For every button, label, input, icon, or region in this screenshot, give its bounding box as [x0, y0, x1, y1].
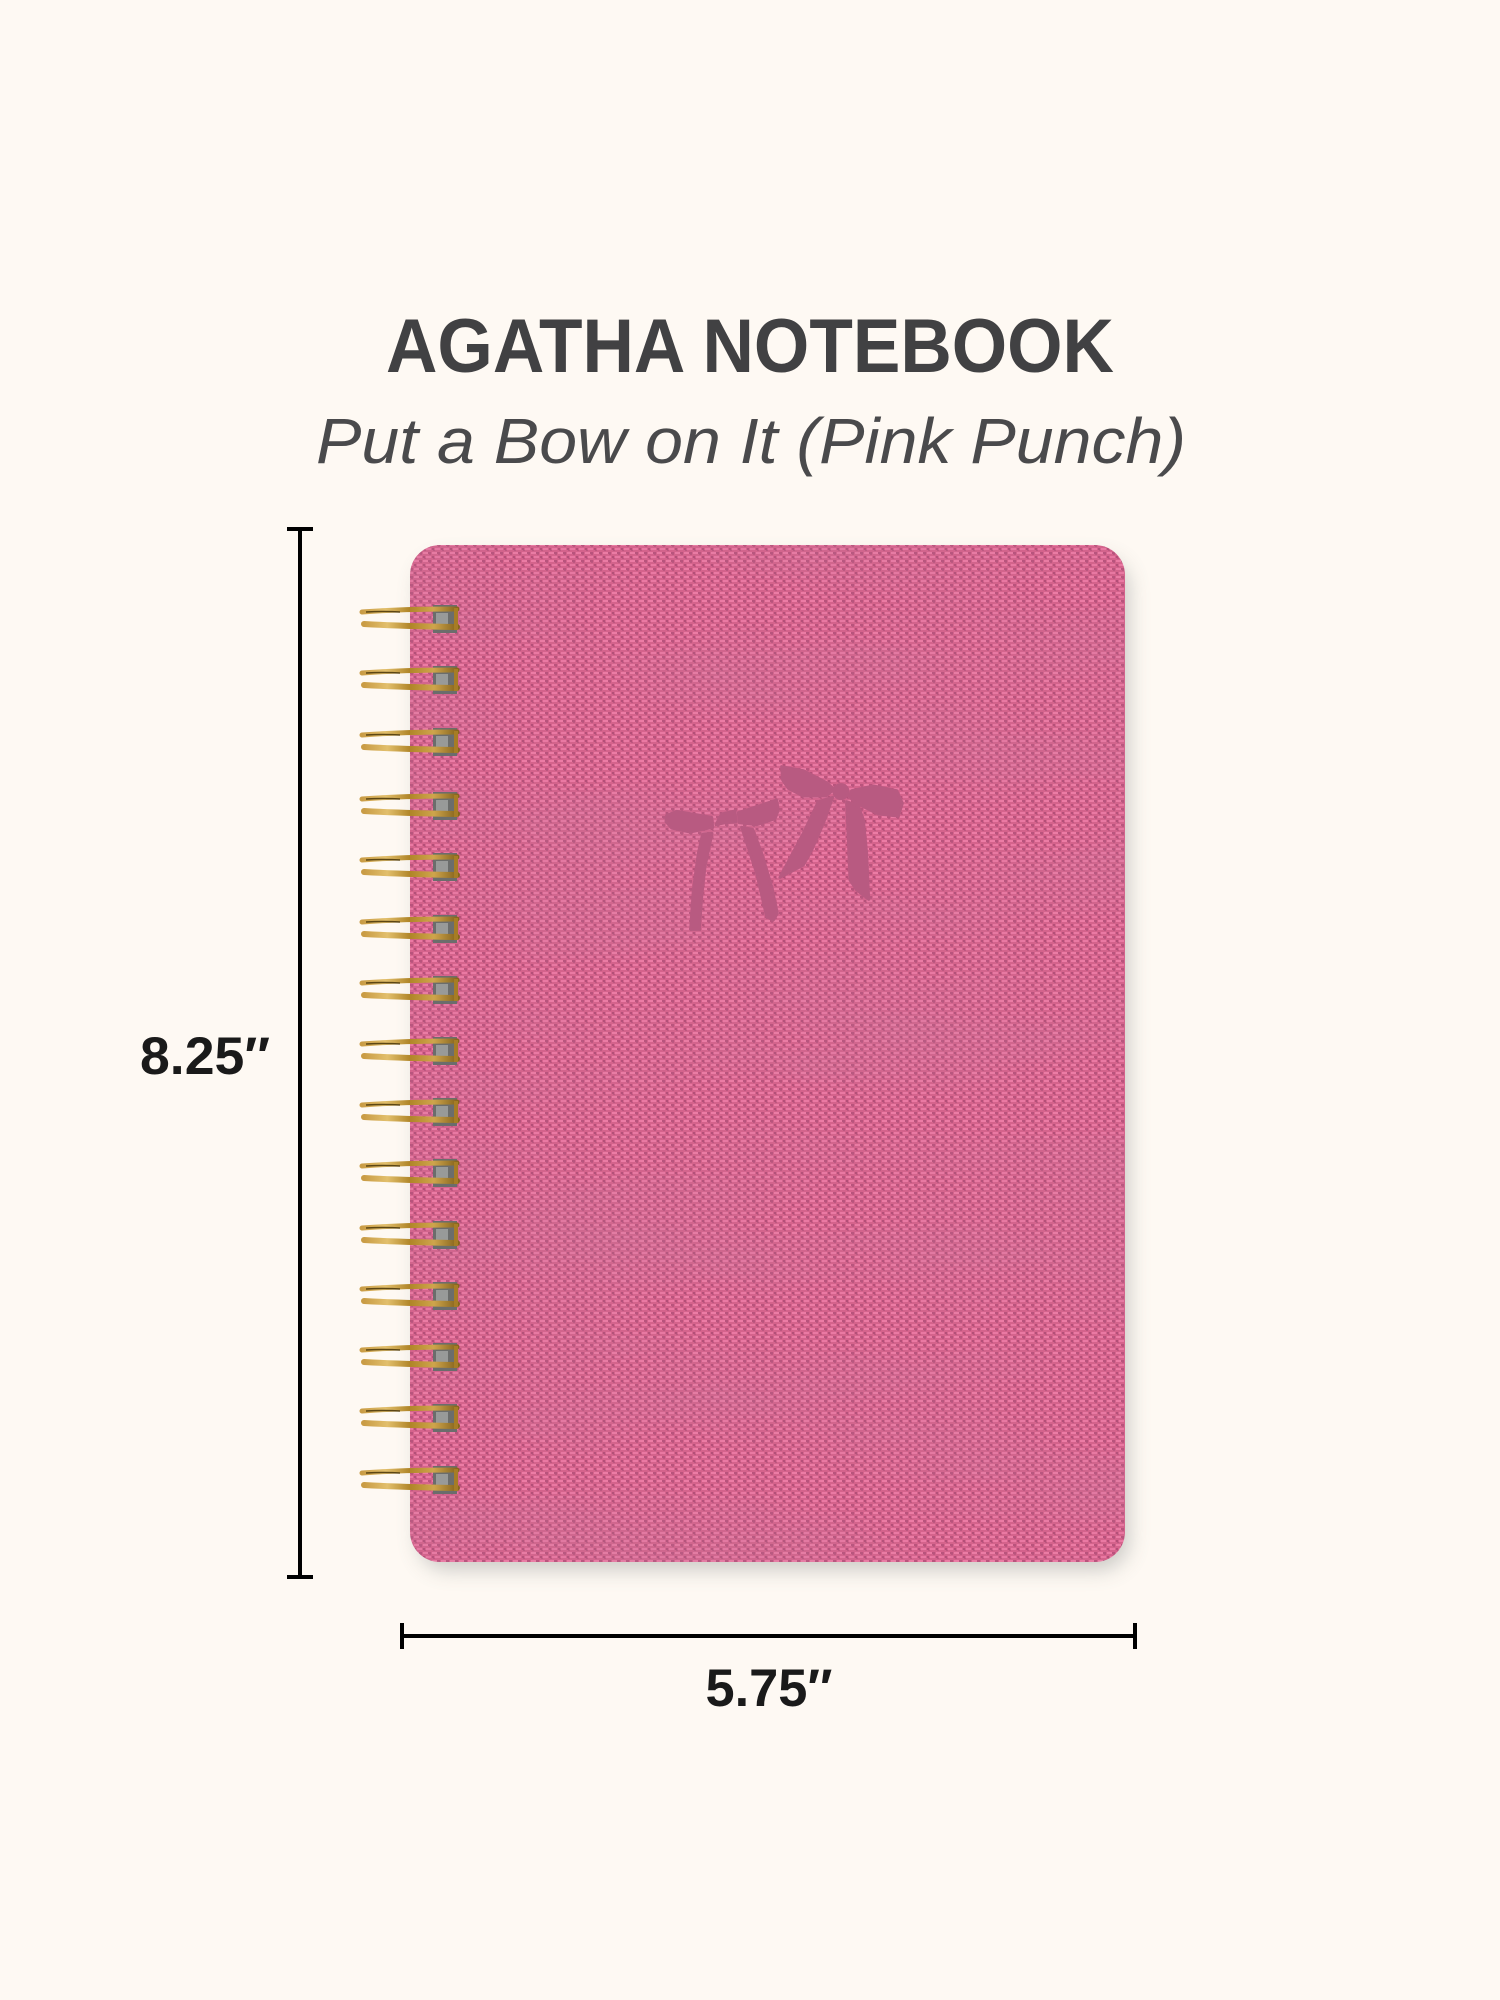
title: AGATHA NOTEBOOK — [386, 304, 1114, 389]
height label: 8.25″ — [140, 1027, 270, 1086]
height dimension line — [287, 529, 313, 1577]
notebook cover — [410, 545, 1125, 1562]
width label: 5.75″ — [706, 1659, 832, 1718]
width dimension line — [402, 1623, 1135, 1649]
spiral binding — [362, 605, 457, 1494]
subtitle: Put a Bow on It (Pink Punch) — [316, 405, 1186, 477]
embossed bows — [666, 767, 902, 929]
cover shadow — [418, 558, 1129, 1570]
notebook — [362, 545, 1129, 1570]
